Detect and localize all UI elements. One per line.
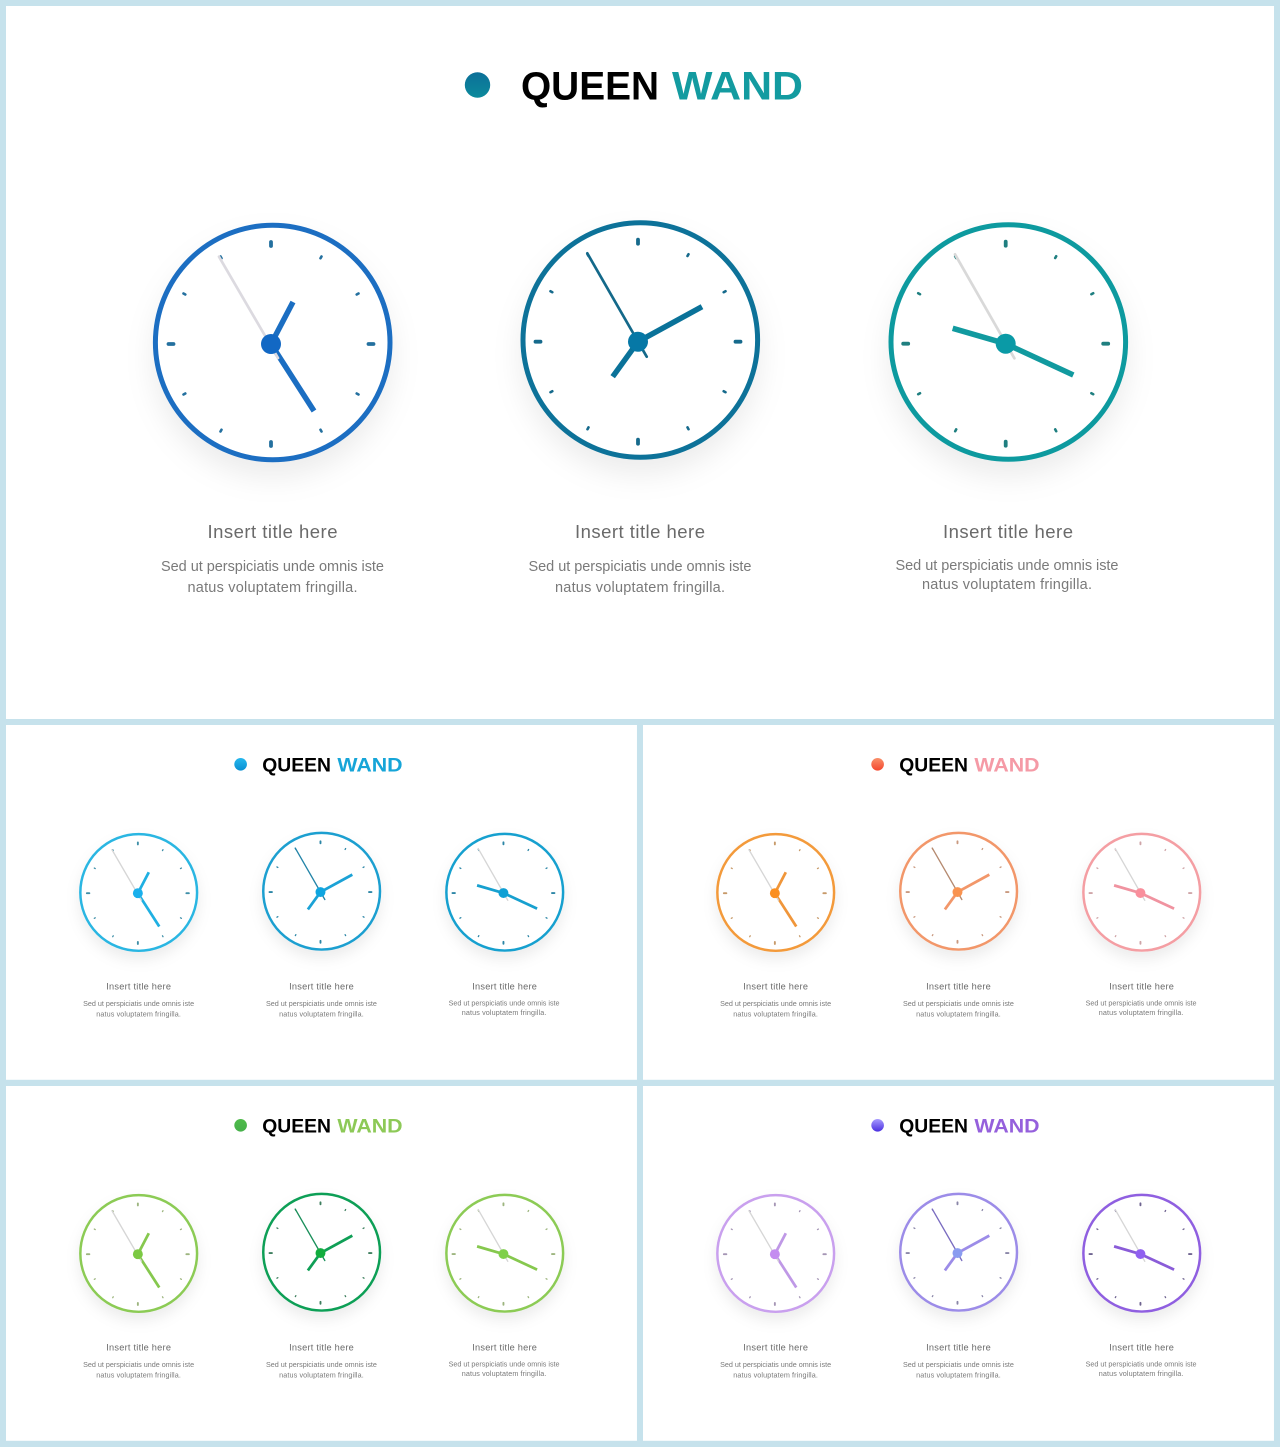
hour ticks (168, 242, 374, 446)
caption 2: natus voluptatem fringilla. (279, 1010, 364, 1019)
panel: orange slide (643, 725, 1274, 1080)
title (871, 1116, 1040, 1138)
clock hands (295, 848, 352, 909)
clock hands (477, 1210, 537, 1270)
caption 1 (720, 982, 831, 1019)
caption 1: Insert title here (106, 982, 171, 992)
clock 3 (1083, 834, 1200, 951)
clock 1 (80, 834, 197, 951)
caption 1: natus voluptatem fringilla. (96, 1371, 181, 1380)
title: WAND (337, 755, 403, 777)
hour ticks (906, 1202, 1008, 1304)
caption 1: natus voluptatem fringilla. (96, 1010, 181, 1019)
clock 3: green-teal (891, 225, 1126, 459)
caption 1 (83, 1343, 194, 1380)
hour ticks (724, 1203, 826, 1305)
caption 3: natus voluptatem fringilla. (462, 1369, 546, 1378)
caption 3 (1086, 982, 1197, 1017)
title: WAND (337, 1116, 403, 1138)
clock ring (1083, 834, 1200, 951)
clock hub (133, 1249, 143, 1259)
caption 1: Sed ut perspiciatis unde omnis iste (720, 999, 831, 1008)
caption 2 (266, 982, 377, 1019)
caption 3: Insert title here (1109, 982, 1174, 992)
title: QUEEN (262, 1116, 331, 1138)
title (465, 64, 803, 108)
hour ticks (87, 1203, 189, 1305)
caption 3: Sed ut perspiciatis unde omnis iste (449, 1360, 560, 1369)
clock hands (749, 850, 796, 927)
title: WAND (672, 64, 803, 108)
caption 2: Sed ut perspiciatis unde omnis iste (528, 559, 752, 575)
clock hub (953, 887, 962, 897)
caption 2: Sed ut perspiciatis unde omnis iste (903, 999, 1014, 1008)
clock 2: deep teal (523, 223, 758, 457)
caption 2: Insert title here (926, 1343, 991, 1353)
clock 2 (900, 833, 1017, 950)
caption 2: Sed ut perspiciatis unde omnis iste (266, 999, 377, 1008)
clock hands (1114, 849, 1174, 909)
caption 2 (266, 1343, 377, 1380)
panel: blue slide (6, 725, 637, 1080)
caption 3: natus voluptatem fringilla. (462, 1008, 546, 1017)
caption 1: natus voluptatem fringilla. (188, 580, 358, 596)
caption 3: Insert title here (1109, 1343, 1174, 1353)
clock hands (295, 1209, 352, 1270)
title: WAND (974, 1116, 1040, 1138)
caption 1: Insert title here (208, 521, 338, 542)
clock ring (1083, 1195, 1200, 1312)
caption 2: natus voluptatem fringilla. (555, 580, 725, 596)
clock ring (523, 223, 758, 457)
hour ticks (1089, 1203, 1191, 1305)
clock 1 (717, 834, 834, 951)
hour ticks (1089, 842, 1191, 944)
clock hub (1135, 1249, 1145, 1259)
clock hub (953, 1248, 962, 1258)
clock hands (112, 850, 159, 927)
clock hands (932, 848, 989, 909)
hour ticks (452, 842, 554, 944)
caption 3: Sed ut perspiciatis unde omnis iste (1086, 1360, 1197, 1369)
caption 3: natus voluptatem fringilla. (922, 577, 1092, 593)
panel: purple slide (643, 1086, 1274, 1441)
title: QUEEN (262, 755, 331, 777)
clock ring (446, 1195, 563, 1312)
caption 1: natus voluptatem fringilla. (733, 1371, 818, 1380)
caption 1 (720, 1343, 831, 1380)
clock 1 (717, 1195, 834, 1312)
caption 3: Insert title here (943, 521, 1073, 542)
caption 2: natus voluptatem fringilla. (916, 1010, 1001, 1019)
clock 3 (446, 1195, 563, 1312)
caption 1: Insert title here (743, 1343, 808, 1353)
clock hands (219, 257, 314, 411)
clock hub (498, 1249, 508, 1259)
clock hands (932, 1209, 989, 1270)
caption 2 (903, 982, 1014, 1019)
title (234, 1116, 403, 1138)
clock hub (316, 1248, 325, 1258)
caption 1: Insert title here (106, 1343, 171, 1353)
clock ring (900, 1194, 1017, 1311)
hour ticks (269, 1202, 371, 1304)
caption 1: Sed ut perspiciatis unde omnis iste (83, 999, 194, 1008)
caption 1: natus voluptatem fringilla. (733, 1010, 818, 1019)
clock 3 (1083, 1195, 1200, 1312)
clock hands (749, 1211, 796, 1288)
clock 1: blue (155, 225, 390, 460)
clock hub (316, 887, 325, 897)
caption 3 (449, 1343, 560, 1378)
hour ticks (724, 842, 826, 944)
clock hub (996, 334, 1016, 354)
hour ticks (269, 841, 371, 943)
clock hands (112, 1211, 159, 1288)
title: WAND (974, 755, 1040, 777)
clock ring (155, 225, 390, 460)
clock hands (477, 849, 537, 909)
hour ticks (536, 240, 740, 444)
title: QUEEN (899, 1116, 968, 1138)
caption 1 (161, 521, 384, 596)
caption 2: Insert title here (289, 982, 354, 992)
clock ring (717, 834, 834, 951)
clock 2 (263, 1194, 380, 1311)
caption 3 (449, 982, 560, 1017)
clock hub (498, 888, 508, 898)
caption 2: Sed ut perspiciatis unde omnis iste (903, 1360, 1014, 1369)
caption 2: Insert title here (926, 982, 991, 992)
clock 3 (446, 834, 563, 951)
hour ticks (906, 841, 1008, 943)
clock 2 (900, 1194, 1017, 1311)
caption 2 (903, 1343, 1014, 1380)
caption 3 (1086, 1343, 1197, 1378)
caption 1 (83, 982, 194, 1019)
clock hub (261, 334, 281, 354)
clock hub (628, 332, 648, 352)
hour ticks (87, 842, 189, 944)
caption 3: natus voluptatem fringilla. (1099, 1008, 1183, 1017)
caption 3: Insert title here (472, 982, 537, 992)
caption 3: Sed ut perspiciatis unde omnis iste (449, 999, 560, 1008)
clock ring (891, 225, 1126, 459)
caption 2 (528, 521, 752, 596)
clock ring (80, 1195, 197, 1312)
clock hub (770, 888, 780, 898)
caption 1: Insert title here (743, 982, 808, 992)
clock hands (953, 254, 1073, 375)
clock ring (717, 1195, 834, 1312)
clock 1 (80, 1195, 197, 1312)
clock hub (770, 1249, 780, 1259)
title (871, 755, 1040, 777)
caption 2: Insert title here (575, 521, 705, 542)
caption 3: natus voluptatem fringilla. (1099, 1369, 1183, 1378)
clock hands (1114, 1210, 1174, 1270)
caption 3 (896, 521, 1118, 593)
hour ticks (452, 1203, 554, 1305)
clock ring (446, 834, 563, 951)
caption 1: Sed ut perspiciatis unde omnis iste (161, 559, 384, 575)
title: QUEEN (521, 64, 659, 108)
clock ring (80, 834, 197, 951)
clock hub (133, 888, 143, 898)
caption 2: Insert title here (289, 1343, 354, 1353)
clock ring (900, 833, 1017, 950)
caption 2: Sed ut perspiciatis unde omnis iste (266, 1360, 377, 1369)
panel: green slide (6, 1086, 637, 1441)
title: QUEEN (899, 755, 968, 777)
caption 1: Sed ut perspiciatis unde omnis iste (83, 1360, 194, 1369)
title (234, 755, 403, 777)
clock hub (1135, 888, 1145, 898)
caption 3: Sed ut perspiciatis unde omnis iste (896, 558, 1118, 574)
panel: main teal slide (6, 6, 1274, 719)
caption 3: Sed ut perspiciatis unde omnis iste (1086, 999, 1197, 1008)
clock ring (263, 1194, 380, 1311)
caption 2: natus voluptatem fringilla. (279, 1371, 364, 1380)
caption 2: natus voluptatem fringilla. (916, 1371, 1001, 1380)
caption 1: Sed ut perspiciatis unde omnis iste (720, 1360, 831, 1369)
clock hands (587, 253, 702, 377)
hour ticks (903, 242, 1108, 446)
clock 2 (263, 833, 380, 950)
caption 3: Insert title here (472, 1343, 537, 1353)
clock ring (263, 833, 380, 950)
